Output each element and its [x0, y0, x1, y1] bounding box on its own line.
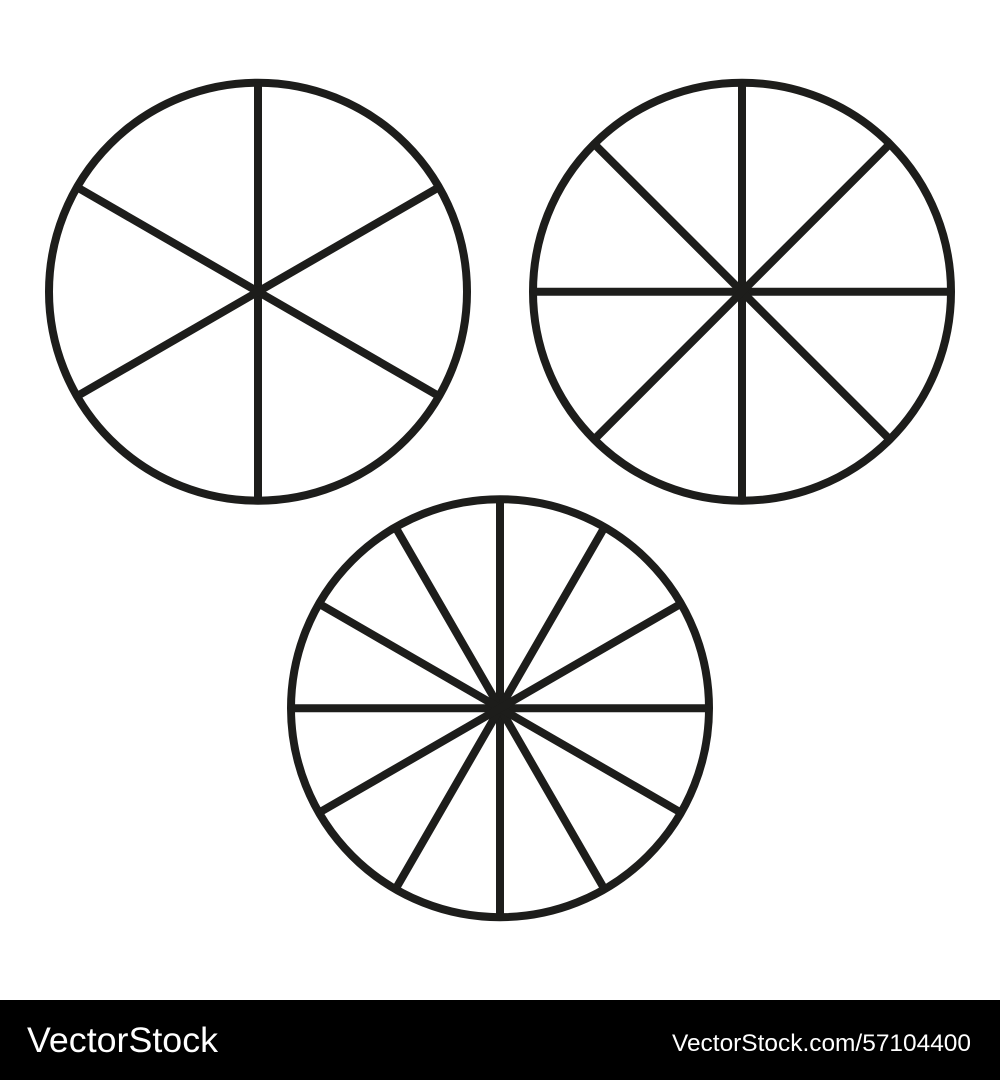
- circle divided into 6 segments: [49, 83, 467, 501]
- circle divided into 8 segments: [533, 83, 951, 501]
- circle divided into 12 segments: [291, 499, 709, 917]
- footer image id text: VectorStock.com/57104400: [672, 1030, 971, 1057]
- footer bar: [0, 1000, 1000, 1080]
- footer logo text: VectorStock: [27, 1021, 219, 1060]
